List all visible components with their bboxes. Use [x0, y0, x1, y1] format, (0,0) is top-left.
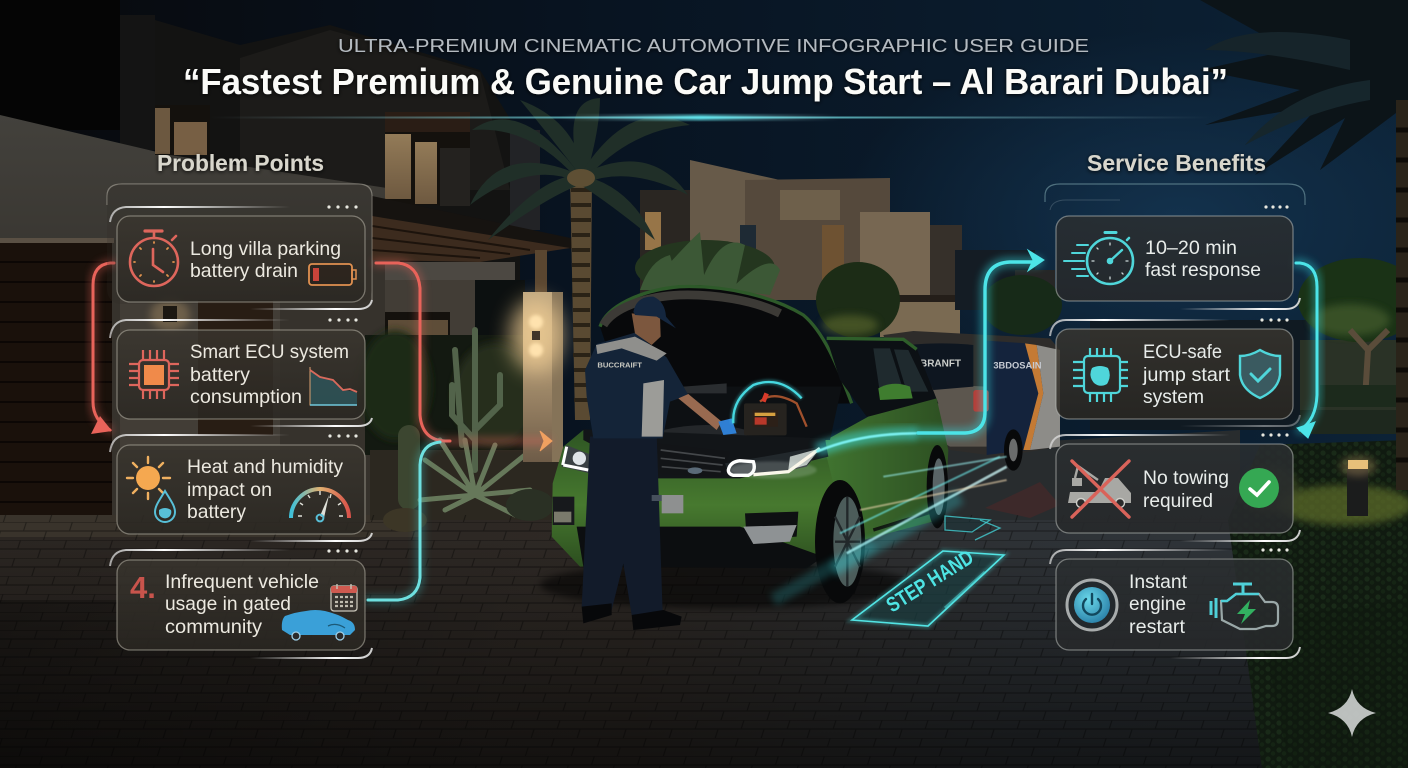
garage door — [0, 238, 114, 515]
text: fast response: fast response — [1145, 259, 1261, 281]
icon: blue car — [282, 610, 355, 640]
greenhouse — [827, 338, 938, 417]
icon: water drop — [155, 491, 175, 522]
ground — [0, 430, 1408, 768]
icon: power button — [1067, 580, 1117, 630]
headlights — [725, 446, 823, 477]
text: instant restart: engine — [1129, 593, 1186, 615]
text: ECU safe: system — [1143, 386, 1204, 408]
trees and hedges — [359, 232, 1408, 455]
text: ECU safe: ECU-safe — [1143, 341, 1222, 363]
technician head and cap — [632, 313, 661, 345]
text: instant restart: Instant — [1129, 571, 1188, 593]
icon: shield check — [1240, 350, 1280, 398]
bumper and plate — [662, 495, 683, 513]
panel: problem points — [107, 150, 372, 658]
text: smart ECU: battery — [190, 364, 250, 386]
technician — [582, 297, 737, 630]
text: heat and humidity — [187, 456, 343, 523]
arrow: problems to car — [376, 263, 552, 451]
open hood — [600, 287, 852, 407]
icon: low battery — [309, 264, 356, 285]
shirt lettering: BUCCRAIFT — [597, 361, 642, 370]
connector arrows — [91, 250, 1317, 600]
card: fast response — [1056, 216, 1293, 301]
text: heat and humidity: battery — [187, 501, 246, 523]
grille — [657, 443, 730, 477]
arrow: benefits loop right — [1296, 263, 1317, 438]
card: no towing — [1056, 444, 1293, 533]
van lettering: BRANFT — [920, 359, 961, 370]
text: ECU safe: jump start — [1142, 364, 1231, 386]
center palm tree — [470, 98, 690, 420]
icon: gauge — [291, 489, 349, 521]
energy light streams — [773, 433, 1007, 600]
icon: green check — [1239, 468, 1279, 508]
text: instant restart — [1129, 571, 1188, 638]
arrow: car to benefits — [918, 250, 1044, 433]
service van — [883, 331, 1060, 471]
icon: stopwatch — [130, 231, 178, 286]
decorative frames — [107, 184, 372, 658]
text: long villa parking: Long villa parking — [190, 238, 341, 260]
text: infrequent usage: community — [165, 616, 262, 638]
battery booster device — [733, 382, 807, 435]
icon: speed stopwatch — [1064, 232, 1133, 284]
small hologram marker — [945, 516, 1000, 540]
icon: sun — [127, 457, 170, 499]
decorative frames — [1045, 184, 1305, 658]
green SUV — [540, 287, 948, 608]
glowing rule — [210, 115, 1210, 120]
wheels — [927, 445, 948, 528]
text: smart ECU: Smart ECU system — [190, 341, 349, 363]
header — [183, 35, 1228, 120]
card: heat and humidity — [117, 445, 365, 534]
text: fast response: 10–20 min — [1145, 237, 1237, 259]
arrow: card 1 to card 2 left — [91, 263, 114, 434]
corner sparkle logo — [1328, 689, 1376, 737]
status dots — [1260, 205, 1289, 552]
cactus and agave garden — [383, 330, 554, 532]
text: long villa parking — [190, 238, 341, 282]
garden lamp — [1340, 456, 1376, 516]
card: smart ECU — [117, 330, 365, 419]
text: smart ECU — [190, 341, 349, 408]
text: infrequent usage: Infrequent vehicle — [165, 571, 319, 593]
step hand pad — [852, 546, 1004, 626]
text: ECU safe — [1142, 341, 1231, 408]
service van: 3BDOSAIN — [993, 361, 1042, 371]
text: heat and humidity: impact on — [187, 479, 272, 501]
arrow: infrequent usage to car — [368, 442, 440, 600]
text: instant restart: restart — [1129, 616, 1186, 638]
heading: problem points: Problem Points — [157, 150, 324, 176]
card: infrequent usage — [117, 560, 365, 650]
status dots — [327, 205, 358, 553]
front body — [552, 430, 838, 567]
right villas — [640, 160, 1055, 337]
text: heat and humidity: Heat and humidity — [187, 456, 343, 478]
step hand pad: STEP HAND — [882, 546, 978, 617]
side body — [820, 398, 948, 557]
text: smart ECU: consumption — [190, 386, 302, 408]
holographic floor projection — [852, 516, 1004, 626]
card: long villa parking — [117, 216, 365, 302]
hedge right — [1228, 440, 1408, 768]
panel: service benefits — [1045, 150, 1305, 658]
supertitle: ULTRA-PREMIUM CINEMATIC AUTOMOTIVE INFOGRAPHIC USER GUIDE — [338, 35, 1089, 56]
icon: processor chip — [129, 350, 179, 399]
icon: cyan chip — [1073, 348, 1128, 402]
number 4: 4. — [130, 570, 156, 605]
engine bay — [660, 387, 842, 440]
top right palm — [1200, 0, 1408, 490]
card: instant restart — [1056, 559, 1293, 650]
gate pillar with lights — [510, 292, 563, 462]
main title: “Fastest Premium & Genuine Car Jump Start – Al Barari Dubai” — [183, 61, 1228, 102]
icon: crossed tow truck — [1068, 461, 1131, 517]
text: fast response — [1145, 237, 1261, 281]
text: no towing: No towing — [1143, 467, 1229, 489]
text: no towing — [1143, 467, 1229, 512]
hood slab — [583, 429, 828, 478]
text: infrequent usage — [165, 571, 319, 638]
text: long villa parking: battery drain — [190, 260, 298, 282]
text: infrequent usage: usage in gated — [165, 593, 291, 615]
chart: battery decline — [310, 367, 357, 405]
heading: service benefits: Service Benefits — [1087, 150, 1266, 176]
icon: engine bolt — [1211, 584, 1278, 629]
text: no towing: required — [1143, 490, 1213, 512]
icon: calendar — [331, 584, 357, 611]
card: ECU safe — [1056, 329, 1293, 419]
left villa — [0, 0, 580, 530]
